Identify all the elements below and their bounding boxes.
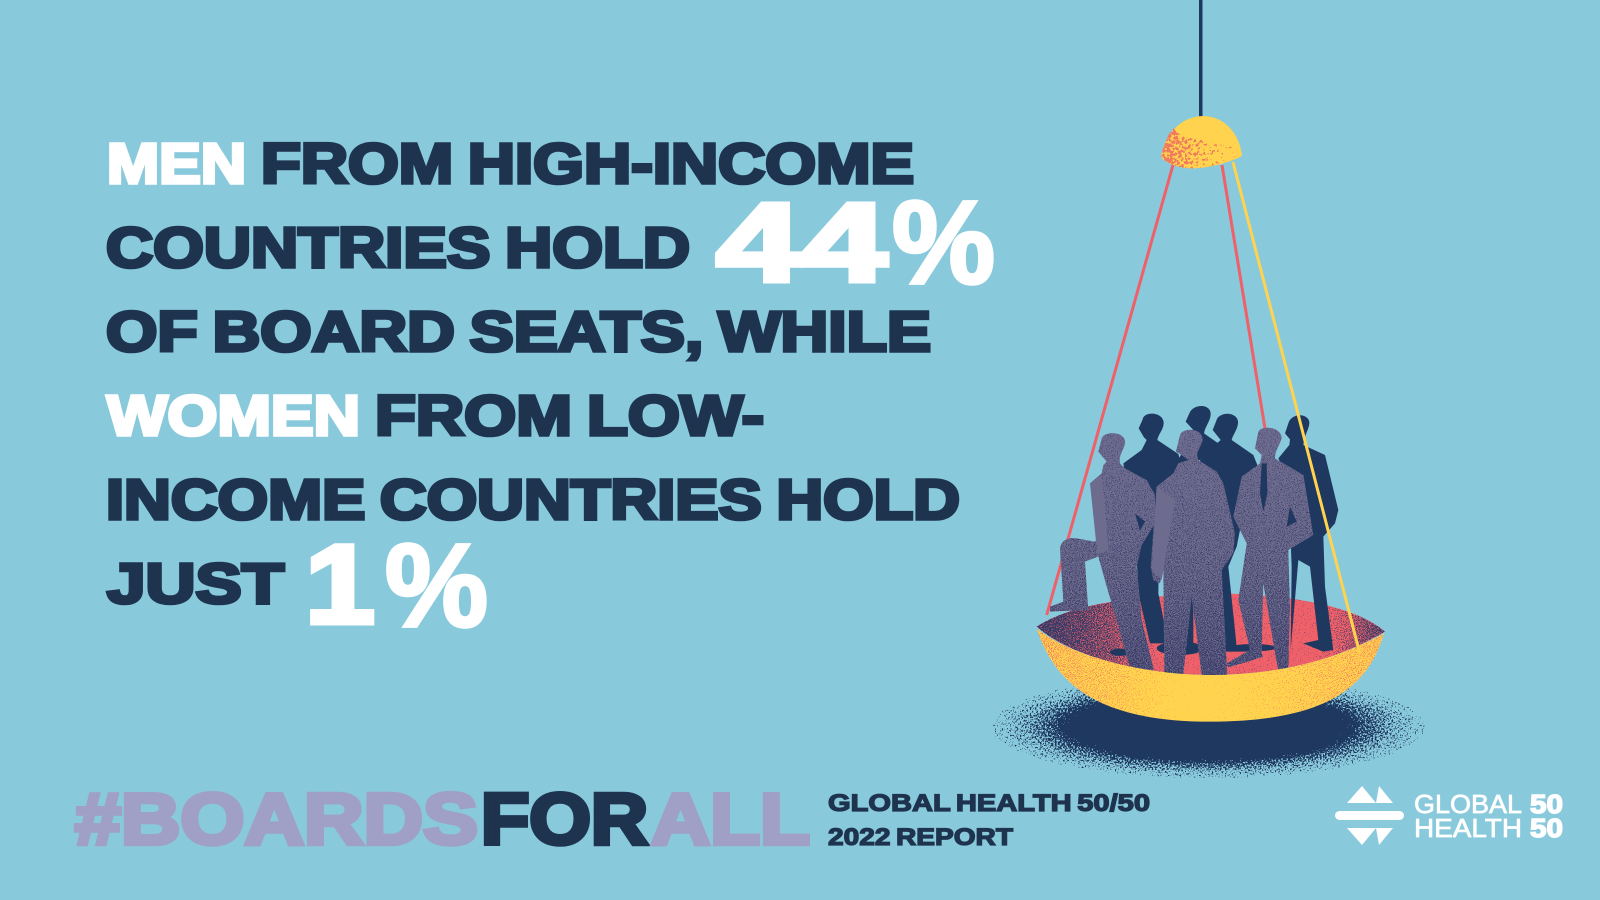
hashtag: ALL (651, 780, 810, 860)
stat: 44%: % (892, 177, 995, 309)
main statement text (106, 132, 995, 652)
stat: 44%: 44 (716, 180, 887, 305)
line 2: COUNTRIES HOLD (106, 216, 690, 280)
line 4: WOMEN (107, 384, 360, 448)
stat: 44% (716, 177, 995, 309)
stat: 1% (305, 520, 488, 652)
yellow rope (1233, 162, 1359, 652)
line 4: FROM LOW- (375, 384, 764, 448)
lamp dome (1161, 116, 1242, 168)
logo wordmark: 50 (1530, 813, 1563, 843)
logo wordmark: HEALTH (1414, 813, 1522, 843)
hashtag: FOR (481, 780, 648, 860)
pan inside (1037, 593, 1385, 675)
report label (828, 790, 1150, 851)
pan front (1037, 628, 1384, 722)
stat: 1%: 1 (305, 522, 375, 647)
logo: Global Health 50/50 (1335, 786, 1563, 845)
shadow under pan (992, 675, 1425, 778)
hashtag (75, 780, 810, 860)
stat: 1%: % (385, 520, 488, 652)
floor shadows (1110, 642, 1277, 656)
report label: GLOBAL HEALTH 50/50 (828, 790, 1150, 817)
logo mark (1335, 786, 1404, 845)
report label: 2022 REPORT (828, 824, 1013, 851)
line 1: MEN (107, 132, 246, 196)
back row figures (1123, 406, 1338, 652)
logo wordmark: GLOBAL (1414, 789, 1522, 819)
line 4 (107, 384, 764, 448)
line 5: INCOME COUNTRIES HOLD (106, 468, 960, 532)
line 6: JUST (107, 552, 284, 616)
red rope right (1222, 165, 1265, 428)
logo wordmark (1414, 789, 1563, 843)
man in tie (1227, 428, 1313, 670)
illustration: men on a hanging scale pan (992, 0, 1425, 778)
kneeling man (1050, 433, 1155, 670)
line 1: FROM HIGH-INCOME (261, 132, 914, 196)
hashtag: #BOARDS (75, 780, 478, 860)
hanging cord (1199, 0, 1202, 125)
line 3: OF BOARD SEATS, WHILE (106, 300, 931, 364)
red rope left (1047, 165, 1173, 615)
centre man (1151, 430, 1235, 675)
logo wordmark: 50 (1530, 789, 1563, 819)
